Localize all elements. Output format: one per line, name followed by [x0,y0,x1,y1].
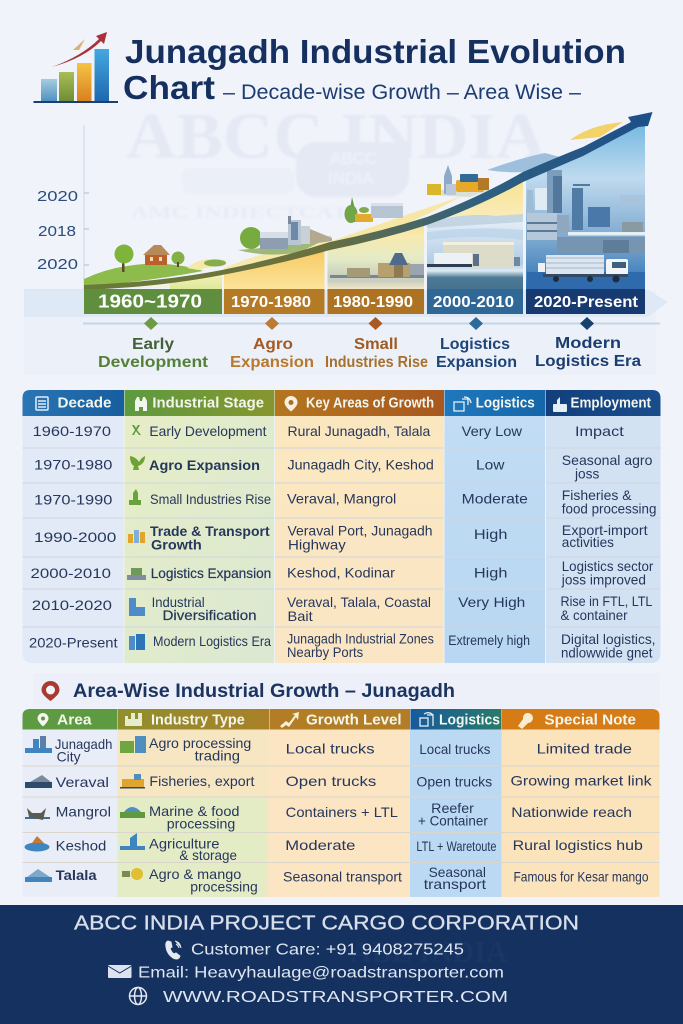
logistics column: LTL + Waretoute [416,838,497,854]
icon: bar chart logo [34,32,118,103]
employment column: Logistics sector [562,558,654,574]
panel: 2020-present scene [487,118,645,289]
axis with year labels: 2020 [37,256,78,273]
logistics column: Very Low [462,423,523,439]
key areas column: Veraval, Talala, Coastal [287,594,431,610]
footer: ABE INDIA [350,936,508,969]
stage column: Early Development [149,423,267,439]
employment column [560,423,656,660]
icon: note tag [518,713,533,729]
decade column: 1970-1980 [34,456,113,472]
area column [55,736,112,883]
logistics column: transport [424,876,486,892]
watermark: ABCC INDIA [126,100,546,173]
logistics column [448,423,530,648]
section panel backdrop [33,673,660,708]
key areas column: Keshod, Kodinar [287,564,395,580]
area column: Talala [56,867,97,883]
axis with year labels: 2018 [38,223,76,240]
axis with year labels [24,125,89,290]
stage column: Trade & Transport [150,523,270,539]
decade strip: 1980-1990 [333,294,413,311]
decade strip: 1970-1980 [231,294,311,311]
table header [22,709,660,730]
industry type column: Agro processing [149,735,251,751]
icon: growth [280,712,299,728]
decade strip: 2000-2010 [433,294,514,311]
employment column: activities [562,534,614,550]
logistics column: High [474,526,507,542]
special note column [510,740,653,884]
stage labels: Agro [253,336,293,353]
table header [22,390,660,416]
employment column: ndlowwide gnet [561,644,652,660]
stage column: Modern Logistics Era [153,633,271,649]
table header: Industrial Stage [152,394,264,412]
panel: 1970-1980 scene [224,216,332,289]
key areas column: Highway [288,536,346,552]
employment column: Rise in FTL, LTL [560,593,653,609]
table header: Logistics [439,712,500,728]
panel: 2000-2010 scene [427,165,523,289]
stage labels [98,335,641,371]
decade column [29,423,118,650]
area column: Junagadh [55,736,112,752]
stage labels: Early [132,336,174,353]
employment column: Digital logistics, [561,631,656,647]
table header: Employment [570,394,651,412]
growth level column: Seasonal transport [283,868,402,884]
area column: Mangrol [56,804,111,820]
special note column: Limited trade [537,740,632,756]
stage column: Agro Expansion [149,457,260,473]
special note column: Growing market link [510,772,653,788]
icon: mail [108,965,132,978]
stage column: Small Industries Rise [150,491,271,507]
axis with year labels: 2020 [37,188,78,205]
decade column: 1990-2000 [34,529,117,545]
stage labels: Expansion [230,354,314,371]
area icons [24,736,52,882]
stage labels: Logistics [440,336,510,353]
decade strip [84,289,645,314]
decade column: 2000-2010 [30,565,111,581]
key areas column: Bait [288,608,313,624]
logistics column: Reefer [431,800,474,816]
table header: Special Note [544,712,636,728]
stage labels: Development [98,354,209,371]
area column: Veraval [56,774,109,790]
decade column: 1960-1970 [33,423,111,439]
logistics column: Low [476,456,505,472]
key areas column [287,423,434,660]
table header: Growth Level [306,712,402,728]
stage column: Growth [151,536,202,552]
title [123,33,626,106]
panel: 1980-1990 scene [326,196,462,289]
key areas column: Veraval Port, Junagadh [288,522,432,538]
table header: Industry Type [151,712,245,728]
title: Junagadh Industrial Evolution [125,33,626,70]
area column: Keshod [56,838,106,854]
employment column: Impact [575,423,624,439]
special note column: Rural logistics hub [513,837,643,853]
special note column: Famous for Kesar mango [514,868,649,884]
icon: calendar [36,397,48,410]
industry type column: Agriculture [149,836,220,852]
stage labels: Logistics Era [535,353,641,370]
employment column: joss improved [561,572,646,588]
title: – Decade-wise Growth – Area Wise – [223,81,581,104]
chart: industrial growth timeline [24,112,668,371]
watermark: ABCC [330,149,377,168]
footer: WWW.ROADSTRANSPORTER.COM [163,989,508,1006]
table column backgrounds [22,416,660,663]
key areas column: Junagadh Industrial Zones [287,630,434,646]
growth level column: Open trucks [286,773,376,789]
footer [0,905,683,1024]
special note column: Nationwide reach [511,804,632,820]
table header: Area [57,712,92,728]
icon: factory [125,713,142,726]
growth level column: Local trucks [286,740,375,756]
watermark [24,100,656,375]
industry type column: & storage [179,847,237,863]
icon: pin [38,713,48,726]
logistics column [416,741,497,892]
small city cluster on the curve [427,165,490,197]
stage icons [127,425,146,650]
stage column: Diversification [162,607,256,623]
employment column: Fisheries & [562,487,632,503]
footer: Email: Heavyhaulage@roadstransporter.com [138,964,504,982]
title: Chart [123,69,215,106]
growth level column: Containers + LTL [286,804,398,820]
table header: Decade [58,394,112,412]
icon: rising growth arrow [84,112,652,290]
icon: red location pin [42,681,60,701]
industry type column: trading [195,748,240,764]
icon: logistics [420,713,433,726]
stage column [149,423,271,649]
industry type column: processing [167,816,235,832]
stage labels: Small [354,336,398,353]
table header: Logistics [476,394,535,412]
icon: factory [135,397,147,411]
decade column: 2010-2020 [32,597,112,613]
logistics column: Local trucks [419,741,490,757]
stage labels: Industries Rise [325,354,428,371]
table column backgrounds [22,729,660,897]
logistics column: Seasonal [429,864,486,880]
growth level column: Moderate [285,837,356,853]
industry type column [149,735,258,894]
industry type column: processing [190,878,258,894]
logistics column: + Container [418,812,488,828]
table header: Key Areas of Growth [306,394,434,412]
logistics column: Open trucks [416,774,492,790]
logistics column: Moderate [462,490,528,506]
employment column: Seasonal agro [562,452,653,468]
icon: truck [538,255,628,282]
key areas column: Nearby Ports [287,644,363,660]
decade strip: 2020-Present [534,294,639,311]
decade column: 1970-1990 [34,492,113,508]
footer: Customer Care: +91 9408275245 [191,942,464,958]
icon: phone [166,941,181,959]
icon: globe [130,988,146,1004]
table: decade-wise growth [22,390,660,663]
icon: logistics box [454,397,471,411]
employment column: Export-import [562,522,648,538]
icon: location pin [284,396,298,412]
logistics column: Extremely high [448,632,530,648]
timeline markers [83,317,660,330]
key areas column: Rural Junagadh, Talala [288,423,431,439]
table: area-wise growth [22,709,660,897]
industry type column: Fisheries, export [149,773,255,789]
key areas column: Junagadh City, Keshod [288,456,434,472]
employment column: food processing [562,500,656,516]
decade strip: 1960~1970 [98,292,202,312]
icon: employment [553,397,567,412]
industry icons [120,736,146,880]
area column: City [57,748,81,764]
employment column: & container [560,607,628,623]
industry type column: Agro & mango [149,866,242,882]
footer: ABCC INDIA PROJECT CARGO CORPORATION [74,912,579,934]
key areas column: Veraval, Mangrol [287,490,396,506]
stage labels: Expansion [436,354,517,371]
logistics column: Very High [458,594,525,610]
background band arrow [24,290,668,317]
employment column: joss [574,466,599,482]
stage column: Logistics Expansion [151,565,271,581]
growth level column [283,740,402,884]
logistics column: High [474,564,507,580]
industry type column: Marine & food [149,803,240,819]
stage column: Industrial [152,594,205,610]
section heading: Area-Wise Industrial Growth – Junagadh [73,681,455,702]
stage labels: Modern [555,335,621,352]
watermark: INDIA [328,169,374,188]
decade column: 2020-Present [29,634,118,650]
watermark: AMC INDIECTCAT [131,203,349,222]
panel: 1960-1970 scene [84,244,226,289]
